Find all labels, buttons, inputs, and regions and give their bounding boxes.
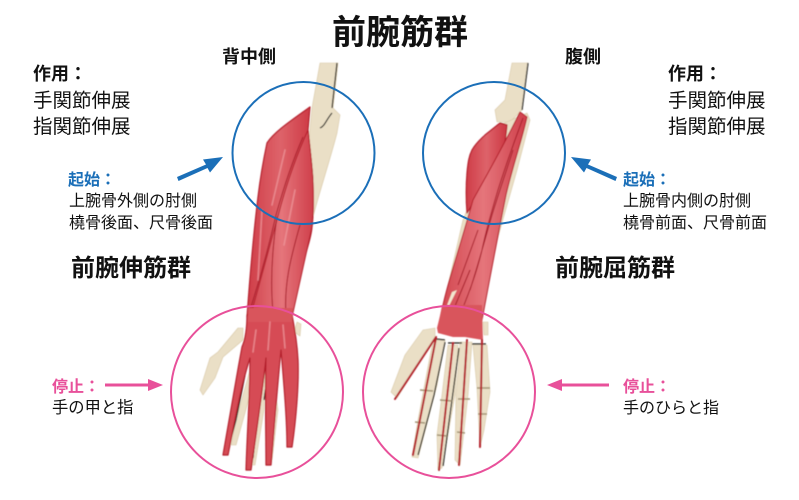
circle: right origin highlight [423,82,565,224]
text block: left insertion [52,378,133,417]
palmar bones [391,63,530,470]
arrow: left origin [177,157,223,181]
text block: left action: 指関節伸展 [33,116,131,138]
circle: right insertion highlight [363,306,535,478]
text block: left action: 作用： [33,64,87,84]
heading: flexor group: 前腕屈筋群 [555,255,675,282]
circle: left insertion highlight [171,306,343,478]
text block: left origin [68,171,213,232]
arrow: right origin [571,157,617,181]
text block: right action [668,64,766,138]
text block: left origin: 橈骨後面、尺骨後面 [69,214,213,232]
dorsal hand muscle and tendons [223,308,298,470]
figure: dorsal forearm and hand [200,63,340,470]
arrow: left insertion [105,379,163,391]
heading: extensor group: 前腕伸筋群 [71,255,191,282]
text block: right origin: 上腕骨内側の肘側 [623,192,751,210]
text block: left action: 手関節伸展 [33,90,131,112]
text block: right action: 手関節伸展 [668,90,766,112]
title: 前腕筋群 [332,14,468,52]
text block: right insertion: 手のひらと指 [623,399,719,417]
figure: palmar forearm and hand [391,63,530,470]
text block: left insertion: 停止： [52,378,100,396]
text block: right action: 作用： [668,64,722,84]
circle: left origin highlight [232,82,374,224]
text block: left origin: 上腕骨外側の肘側 [69,192,197,210]
text block: right origin: 起始： [623,171,671,189]
heading: dorsal side: 背中側 [222,47,276,67]
dorsal forearm muscles [247,107,313,317]
heading: palmar side: 腹側 [565,47,601,67]
arrow: right insertion [547,379,609,391]
text block: left insertion: 手の甲と指 [52,399,133,417]
text block: right insertion: 停止： [623,378,671,396]
text block: right origin: 橈骨前面、尺骨前面 [623,214,767,232]
text block: left action [33,64,131,138]
palmar forearm muscles [437,112,527,340]
text block: left origin: 起始： [68,171,116,189]
text block: right insertion [623,378,719,417]
dorsal bones [200,63,340,465]
text block: right origin [623,171,767,232]
palmar finger tendons [395,337,482,470]
text block: right action: 指関節伸展 [668,116,766,138]
